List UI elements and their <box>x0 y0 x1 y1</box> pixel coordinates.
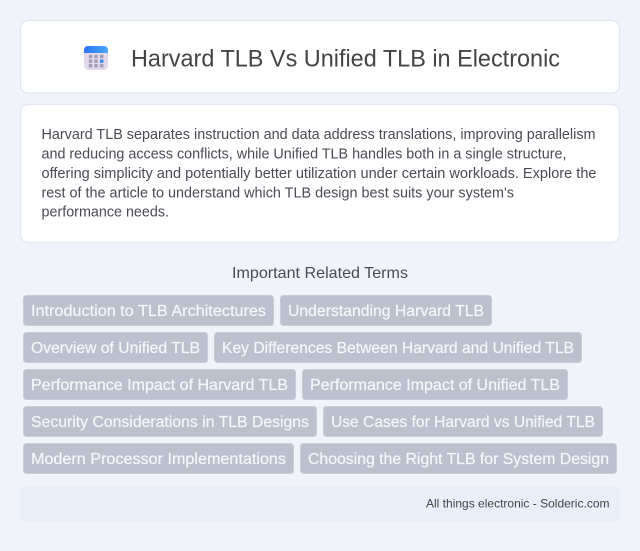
panel: summary paragraph <box>20 104 620 242</box>
tag: key differences: Key Differences Between Harvard and Unified TLB <box>222 340 574 357</box>
tag: choosing: Choosing the Right TLB for System Design <box>308 451 609 468</box>
tag: modern processors <box>24 444 294 474</box>
tag: performance Harvard: Performance Impact of Harvard TLB <box>31 377 288 394</box>
text block: summary: performance needs. <box>42 204 169 220</box>
tag: understanding Harvard <box>280 296 492 326</box>
text block: summary <box>42 127 596 220</box>
tag: overview of unified: Overview of Unified TLB <box>31 340 200 357</box>
tag: security <box>24 406 316 436</box>
tag: security: Security Considerations in TLB Designs <box>31 414 309 431</box>
tag: use cases <box>324 406 602 436</box>
text block: summary: Harvard TLB separates instruction and data address translations, improving parallelism <box>42 127 596 143</box>
tag list <box>24 296 616 474</box>
text block: summary: and reducing access conflicts, while Unified TLB handles both in a single structure, <box>42 146 566 162</box>
tag: understanding Harvard: Understanding Harvard TLB <box>288 303 484 320</box>
tag: key differences <box>214 332 582 362</box>
tag: performance Harvard <box>24 370 296 400</box>
icon: calendar <box>84 46 108 70</box>
tag: performance unified: Performance Impact of Unified TLB <box>310 377 560 394</box>
text block: summary: rest of the article to understand which TLB design best suits your system's <box>42 186 514 202</box>
heading: related terms: Important Related Terms <box>232 265 408 282</box>
panel: header <box>20 20 620 93</box>
tag: introduction: Introduction to TLB Architectures <box>31 303 266 320</box>
tag: modern processors: Modern Processor Implementations <box>31 451 286 468</box>
text block: summary: offering simplicity and potentially better utilization under certain workloads. Explore the <box>42 166 596 182</box>
tag: overview of unified <box>24 332 208 362</box>
tag: performance unified <box>302 370 568 400</box>
tag: use cases: Use Cases for Harvard vs Unified TLB <box>331 414 595 431</box>
tag: introduction <box>24 296 274 326</box>
tag: choosing <box>300 444 616 474</box>
footer credit: All things electronic - Solderic.com <box>426 497 610 511</box>
title: Harvard TLB Vs Unified TLB in Electronic <box>131 46 560 72</box>
footer <box>20 487 620 521</box>
